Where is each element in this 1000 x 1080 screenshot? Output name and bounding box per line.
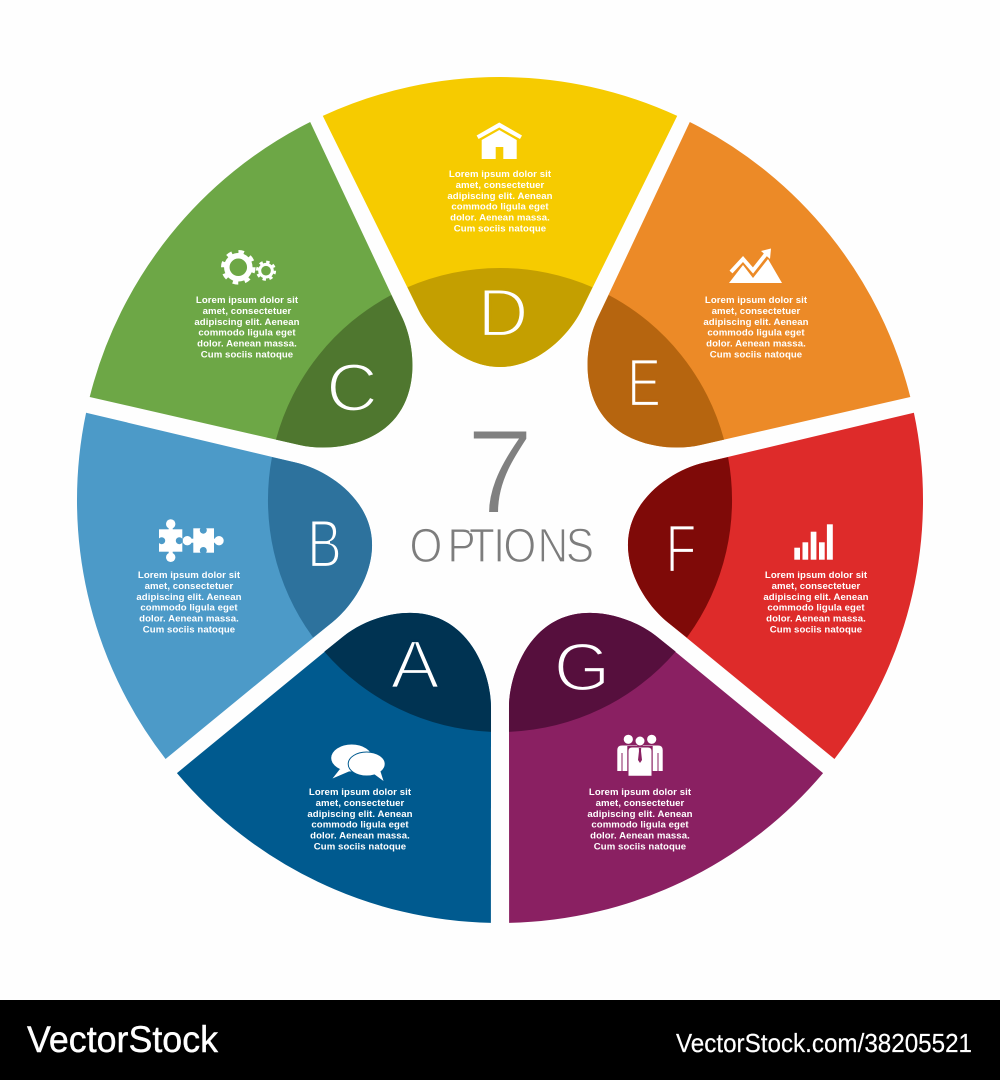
text block A: Lorem ipsum dolor sit <box>309 787 412 798</box>
icon: puzzle pieces <box>158 519 224 562</box>
text block E: commodo ligula eget <box>707 328 805 339</box>
icon: bar chart <box>794 524 833 560</box>
segment D: yellow <box>323 77 677 367</box>
text block A: dolor. Aenean massa. <box>310 831 410 842</box>
segment F: red <box>590 357 952 768</box>
text block G: adipiscing elit. Aenean <box>587 809 693 820</box>
text block B: amet, consectetuer <box>145 581 234 592</box>
text block F: amet, consectetuer <box>772 581 861 592</box>
text block D: Lorem ipsum dolor sit <box>449 169 552 180</box>
text block D: amet, consectetuer <box>456 180 545 191</box>
text block F: Cum sociis natoque <box>770 624 862 636</box>
icon: house <box>477 122 522 159</box>
text block E: Cum sociis natoque <box>710 350 802 360</box>
letter D: D <box>478 275 528 351</box>
text block A: adipiscing elit. Aenean <box>307 809 413 820</box>
center label OPTIONS: OPTIONS <box>409 518 594 573</box>
footer bar <box>0 1000 1000 1080</box>
segment B: light blue <box>48 357 410 768</box>
text block B: dolor. Aenean massa. <box>139 614 239 625</box>
text block F: adipiscing elit. Aenean <box>763 592 869 603</box>
text block B: Cum sociis natoque <box>143 624 235 636</box>
text block G: Cum sociis natoque <box>594 842 686 852</box>
text block G: Lorem ipsum dolor sit <box>589 787 692 798</box>
text block D: dolor. Aenean massa. <box>450 213 550 224</box>
text block B: commodo ligula eget <box>140 603 238 614</box>
center number 7: 7 <box>467 405 533 539</box>
text block C: Cum sociis natoque <box>201 350 293 360</box>
text block E: dolor. Aenean massa. <box>706 339 806 350</box>
text block D: commodo ligula eget <box>451 202 549 213</box>
icon: team of people <box>617 735 663 776</box>
text block E: adipiscing elit. Aenean <box>703 317 809 328</box>
text block C: Lorem ipsum dolor sit <box>196 295 299 306</box>
footer brand: VectorStock <box>27 1019 218 1060</box>
text block E: amet, consectetuer <box>712 306 801 317</box>
text block F: dolor. Aenean massa. <box>766 614 866 625</box>
letter A: A <box>391 626 440 702</box>
segment A: navy blue <box>161 545 600 957</box>
text block A: commodo ligula eget <box>311 820 409 831</box>
text block F: Lorem ipsum dolor sit <box>765 570 868 581</box>
text block G: dolor. Aenean massa. <box>590 831 690 842</box>
text block E: Lorem ipsum dolor sit <box>705 295 808 306</box>
icon: gears <box>223 252 275 283</box>
segment G: purple <box>400 545 839 957</box>
text block B: Lorem ipsum dolor sit <box>138 570 241 581</box>
letter G: G <box>554 629 610 705</box>
text block F: commodo ligula eget <box>767 603 865 614</box>
text block G: amet, consectetuer <box>596 798 685 809</box>
text block C: adipiscing elit. Aenean <box>194 317 300 328</box>
footer url: VectorStock.com/38205521 <box>676 1028 972 1058</box>
letter C: C <box>326 350 378 426</box>
text block C: amet, consectetuer <box>203 306 292 317</box>
text block A: amet, consectetuer <box>316 798 405 809</box>
letter B: B <box>307 505 342 582</box>
text block C: dolor. Aenean massa. <box>197 339 297 350</box>
text block A: Cum sociis natoque <box>314 842 406 852</box>
icon: speech bubbles <box>331 744 385 781</box>
segment E: orange <box>494 98 940 554</box>
text block B: adipiscing elit. Aenean <box>136 592 242 603</box>
segment C: green <box>60 98 506 554</box>
text block G: commodo ligula eget <box>591 820 689 831</box>
letter E: E <box>627 345 661 421</box>
text block D: adipiscing elit. Aenean <box>447 191 553 202</box>
letter F: F <box>666 511 696 587</box>
text block D: Cum sociis natoque <box>454 224 546 234</box>
icon: rising chart <box>729 248 782 283</box>
text block C: commodo ligula eget <box>198 328 296 339</box>
